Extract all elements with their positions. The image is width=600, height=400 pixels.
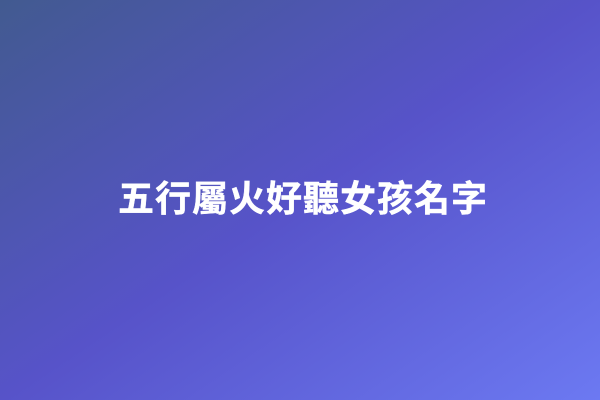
title: 五行屬火好聽女孩名字 [118, 178, 488, 219]
